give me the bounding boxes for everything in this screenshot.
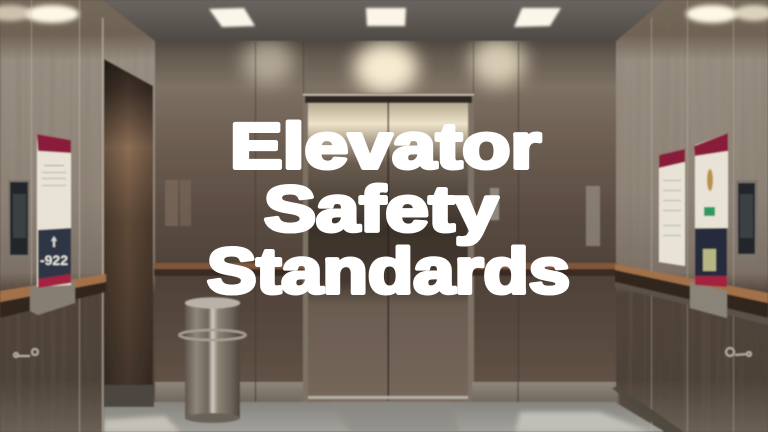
panel: left wall [0,0,155,432]
panel: right notice large [694,133,728,287]
panel: left safety notice: -922 [40,252,68,268]
panel: right wall [612,0,768,432]
icon: left door handle [14,349,38,357]
icon: ceiling light centre [366,8,406,26]
panel: elevator door [303,93,499,403]
panel: back wall [150,38,620,408]
panel: right keypad [736,180,758,258]
icon: ceiling light left [209,8,255,27]
icon: left handrail bracket [30,280,75,315]
title line: Elevator: Elevator [230,110,541,182]
handrail: left wall [0,274,106,318]
title [207,110,570,307]
icon: steel waste bin [180,298,246,423]
title line: Standards: Standards [207,235,570,307]
panel: right notice small [659,149,685,266]
panel: ceiling with lights [100,0,667,41]
side opening [104,59,153,385]
icon: right door handle [726,348,751,356]
panel: left keypad [8,180,30,258]
icon: ceiling light right [514,8,561,27]
panel: left safety notice [37,134,71,288]
handrail: back wall [154,263,618,276]
title line: Safety: Safety [264,173,498,245]
panel: skirting [155,382,618,403]
panel: floor [104,402,665,432]
icon: right handrail bracket [690,282,727,318]
handrail: right wall [615,264,768,325]
